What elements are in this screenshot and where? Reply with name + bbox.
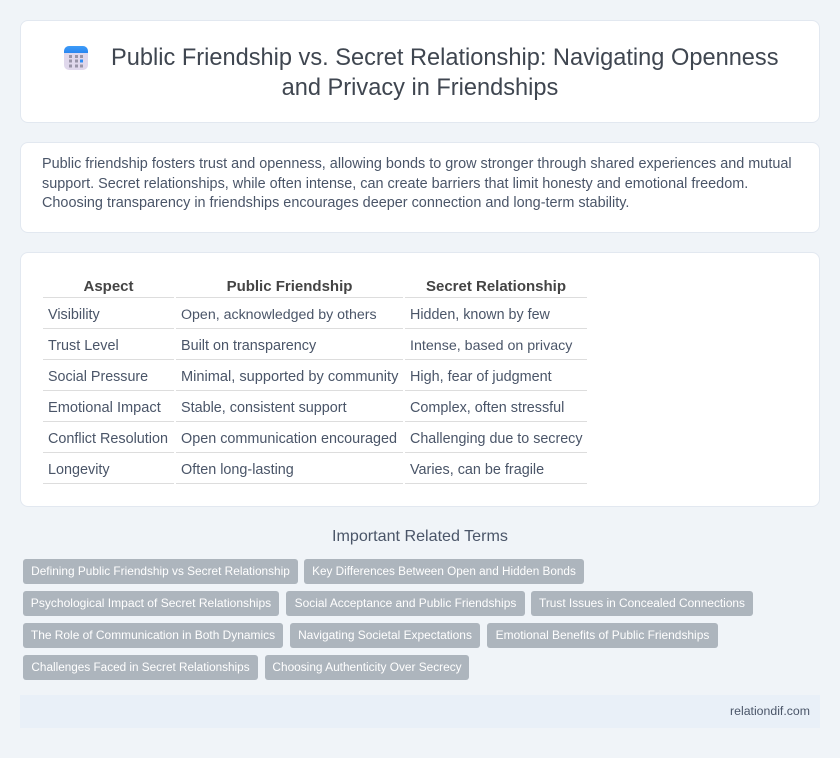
table: comparison: High, fear of judgment [410,369,552,385]
panel: introduction [20,142,820,233]
tags: related terms: Choosing Authenticity Over Secrecy [272,660,462,674]
text: introduction paragraph: Choosing transparency in friendships encourages deeper connection and long-term stability. [42,195,629,211]
table: comparison: Challenging due to secrecy [410,431,582,447]
table: comparison: Longevity [48,462,110,478]
panel: header [20,20,820,123]
table: comparison: Conflict Resolution [48,431,168,447]
table: comparison: Open communication encouraged [181,431,397,447]
tags: related terms: Key Differences Between Open and Hidden Bonds [312,565,576,578]
table: comparison: Secret Relationship [426,278,566,295]
text: site credit: relationdif.com [730,704,810,718]
table: comparison: Stable, consistent support [181,400,347,416]
table: comparison: Hidden, known by few [410,307,550,323]
heading: title: Public Friendship vs. Secret Relationship: Navigating Openness [111,45,779,71]
tags: related terms: Navigating Societal Expectations [298,628,472,642]
tags: related terms: Emotional Benefits of Public Friendships [496,628,709,642]
heading: title: and Privacy in Friendships [282,75,558,101]
icon: calendar [64,46,88,70]
table: comparison: Minimal, supported by community [181,369,398,385]
table: comparison: Open, acknowledged by others [181,307,377,323]
table: comparison: Aspect [83,278,134,295]
table: comparison: Emotional Impact [48,400,161,416]
heading: important related terms: Important Related Terms [332,527,508,545]
tags: related terms: Trust Issues in Concealed Connections [539,596,745,610]
tags: related terms: Defining Public Friendship vs Secret Relationship [31,564,290,578]
tags: related terms: Challenges Faced in Secret Relationships [31,661,250,674]
table: comparison: Public Friendship [227,278,352,295]
table: comparison: Visibility [48,307,100,323]
tags: related terms: Social Acceptance and Public Friendships [295,596,516,610]
text: introduction paragraph: Public friendship fosters trust and openness, allowing bonds to grow stronger through shared experiences and mutual [42,156,792,172]
tags: related terms: The Role of Communication in Both Dynamics [31,628,275,642]
table: comparison: Intense, based on privacy [410,338,572,354]
heading: title [111,45,779,101]
table: comparison: Trust Level [48,338,119,354]
text: introduction paragraph [42,156,792,211]
tags: related terms: Psychological Impact of Secret Relationships [31,596,271,610]
footer bar [20,695,820,728]
table: comparison: Social Pressure [48,369,148,385]
tags: related terms [23,559,753,680]
text: introduction paragraph: support. Secret relationships, while often intense, can create barriers that limit honesty and emotional freedom. [42,176,748,192]
table: comparison: Built on transparency [181,338,316,354]
table: comparison: Varies, can be fragile [410,462,544,478]
panel: comparison table [20,252,820,507]
table: comparison: Complex, often stressful [410,400,564,416]
table: comparison: Often long-lasting [181,462,294,478]
